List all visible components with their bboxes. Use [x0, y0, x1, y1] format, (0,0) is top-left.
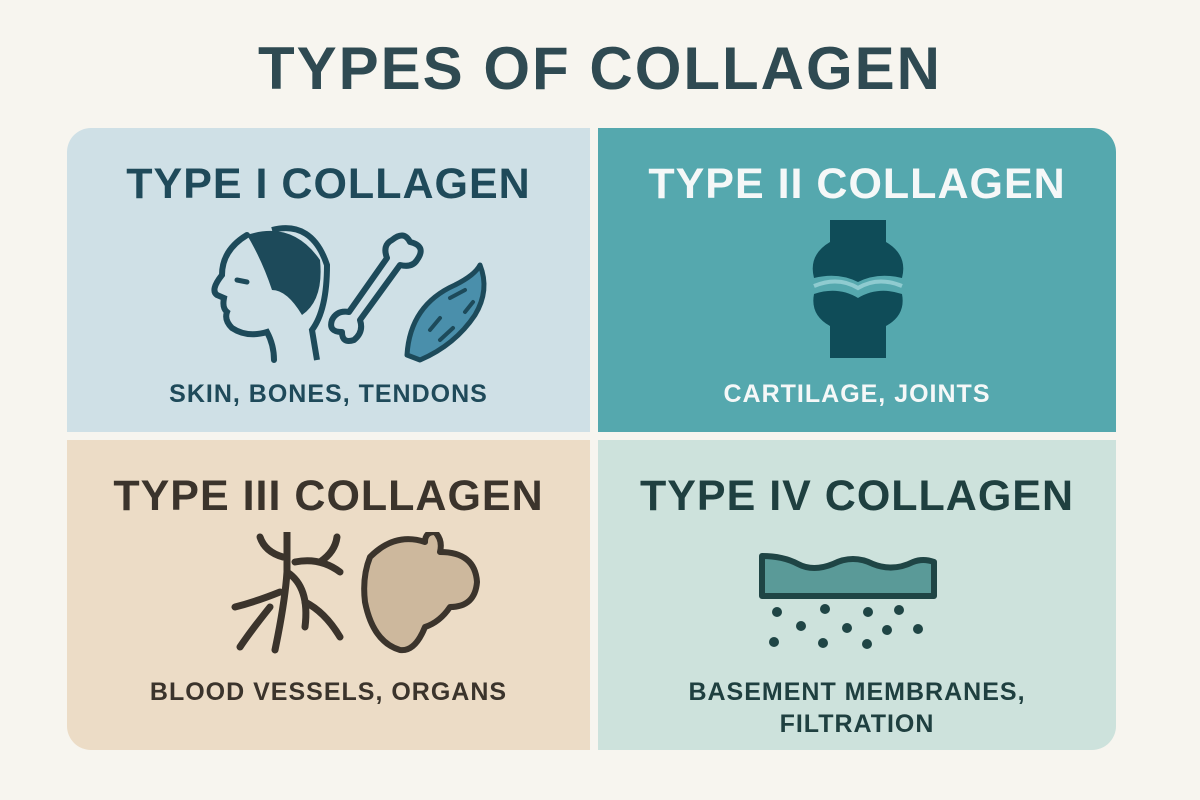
icon: joint [812, 220, 904, 358]
heading: type III: TYPE III COLLAGEN [113, 472, 544, 520]
caption: type IV: BASEMENT MEMBRANES, [688, 678, 1026, 706]
heading: type II: TYPE II COLLAGEN [648, 160, 1066, 208]
caption: type III: BLOOD VESSELS, ORGANS [150, 678, 507, 706]
caption: type IV [688, 678, 1026, 738]
icons: face, bone, tendon [211, 225, 486, 363]
caption: type II: CARTILAGE, JOINTS [723, 380, 990, 408]
title: TYPES OF COLLAGEN [258, 35, 942, 102]
panel: type I [67, 128, 590, 432]
icons: vessels, liver [232, 532, 480, 654]
panel: type IV [598, 440, 1116, 750]
caption: type I: SKIN, BONES, TENDONS [169, 380, 488, 408]
caption: type IV: FILTRATION [780, 710, 934, 738]
panel: type III [67, 440, 590, 750]
heading: type IV: TYPE IV COLLAGEN [640, 472, 1074, 520]
tendon [407, 265, 484, 360]
liver [364, 532, 477, 650]
icon: basement membrane [759, 553, 937, 649]
panel: type II [598, 128, 1116, 432]
heading: type I: TYPE I COLLAGEN [126, 160, 531, 208]
bone [331, 235, 421, 341]
